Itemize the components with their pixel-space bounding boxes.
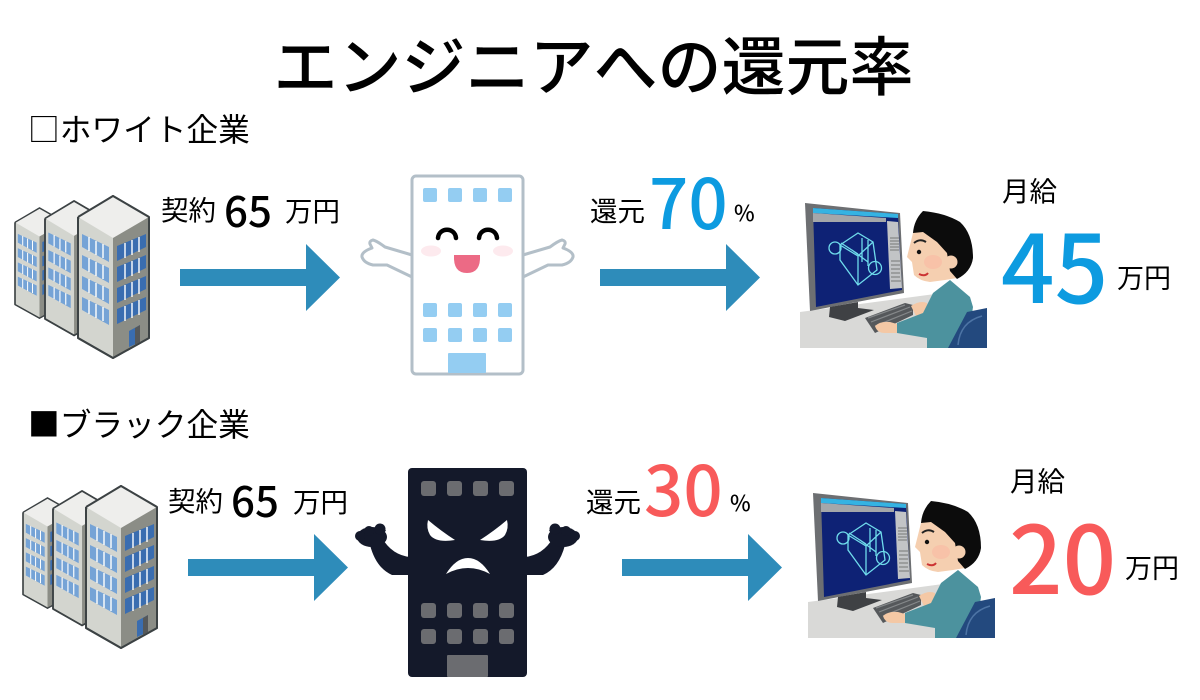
contract label (white row): 万円 bbox=[285, 196, 340, 227]
return rate label (black row) bbox=[586, 436, 751, 536]
contract label (black row) bbox=[168, 469, 348, 530]
monthly salary (black row): 月給 bbox=[1010, 466, 1065, 497]
contract label (black row): 契約 bbox=[168, 486, 223, 517]
return rate label (white row) bbox=[590, 149, 755, 249]
contract label (black row): 万円 bbox=[293, 487, 348, 518]
return rate label (white row): 70 bbox=[649, 149, 728, 249]
monthly salary (white row): 45 bbox=[1001, 195, 1108, 331]
contract label (white row) bbox=[161, 179, 340, 240]
source buildings (white row) bbox=[15, 196, 149, 358]
contract label (white row): 契約 bbox=[161, 195, 216, 226]
heading: black companies: ■ブラック企業 bbox=[28, 400, 250, 446]
monthly salary (black row): 万円 bbox=[1125, 554, 1179, 584]
monthly salary (white row) bbox=[1001, 176, 1171, 331]
monthly salary (black row): 20 bbox=[1009, 486, 1116, 622]
arrow: white company to engineer bbox=[600, 244, 760, 311]
icon: angry black company building bbox=[355, 468, 580, 677]
contract label (black row): 65 bbox=[231, 469, 279, 530]
heading: white companies: □ホワイト企業 bbox=[28, 105, 250, 151]
monthly salary (white row): 月給 bbox=[1002, 176, 1057, 207]
return rate label (black row): % bbox=[730, 486, 751, 518]
icon: engineer at CAD workstation (white row) bbox=[800, 203, 987, 348]
arrow: client to black company bbox=[188, 534, 348, 601]
return rate label (white row): 還元 bbox=[590, 196, 645, 227]
source buildings (black row) bbox=[23, 486, 157, 648]
icon: engineer at CAD workstation (black row) bbox=[808, 493, 995, 638]
arrow: black company to engineer bbox=[622, 534, 782, 601]
return rate label (black row): 還元 bbox=[586, 487, 641, 518]
monthly salary (black row) bbox=[1009, 466, 1179, 622]
contract label (white row): 65 bbox=[224, 179, 272, 240]
title: エンジニアへの還元率 bbox=[274, 32, 914, 104]
return rate label (white row): % bbox=[734, 196, 755, 228]
return rate label (black row): 30 bbox=[644, 436, 723, 536]
icon: smiling white company building bbox=[362, 176, 573, 374]
arrow: client to white company bbox=[180, 244, 340, 311]
monthly salary (white row): 万円 bbox=[1117, 264, 1171, 294]
